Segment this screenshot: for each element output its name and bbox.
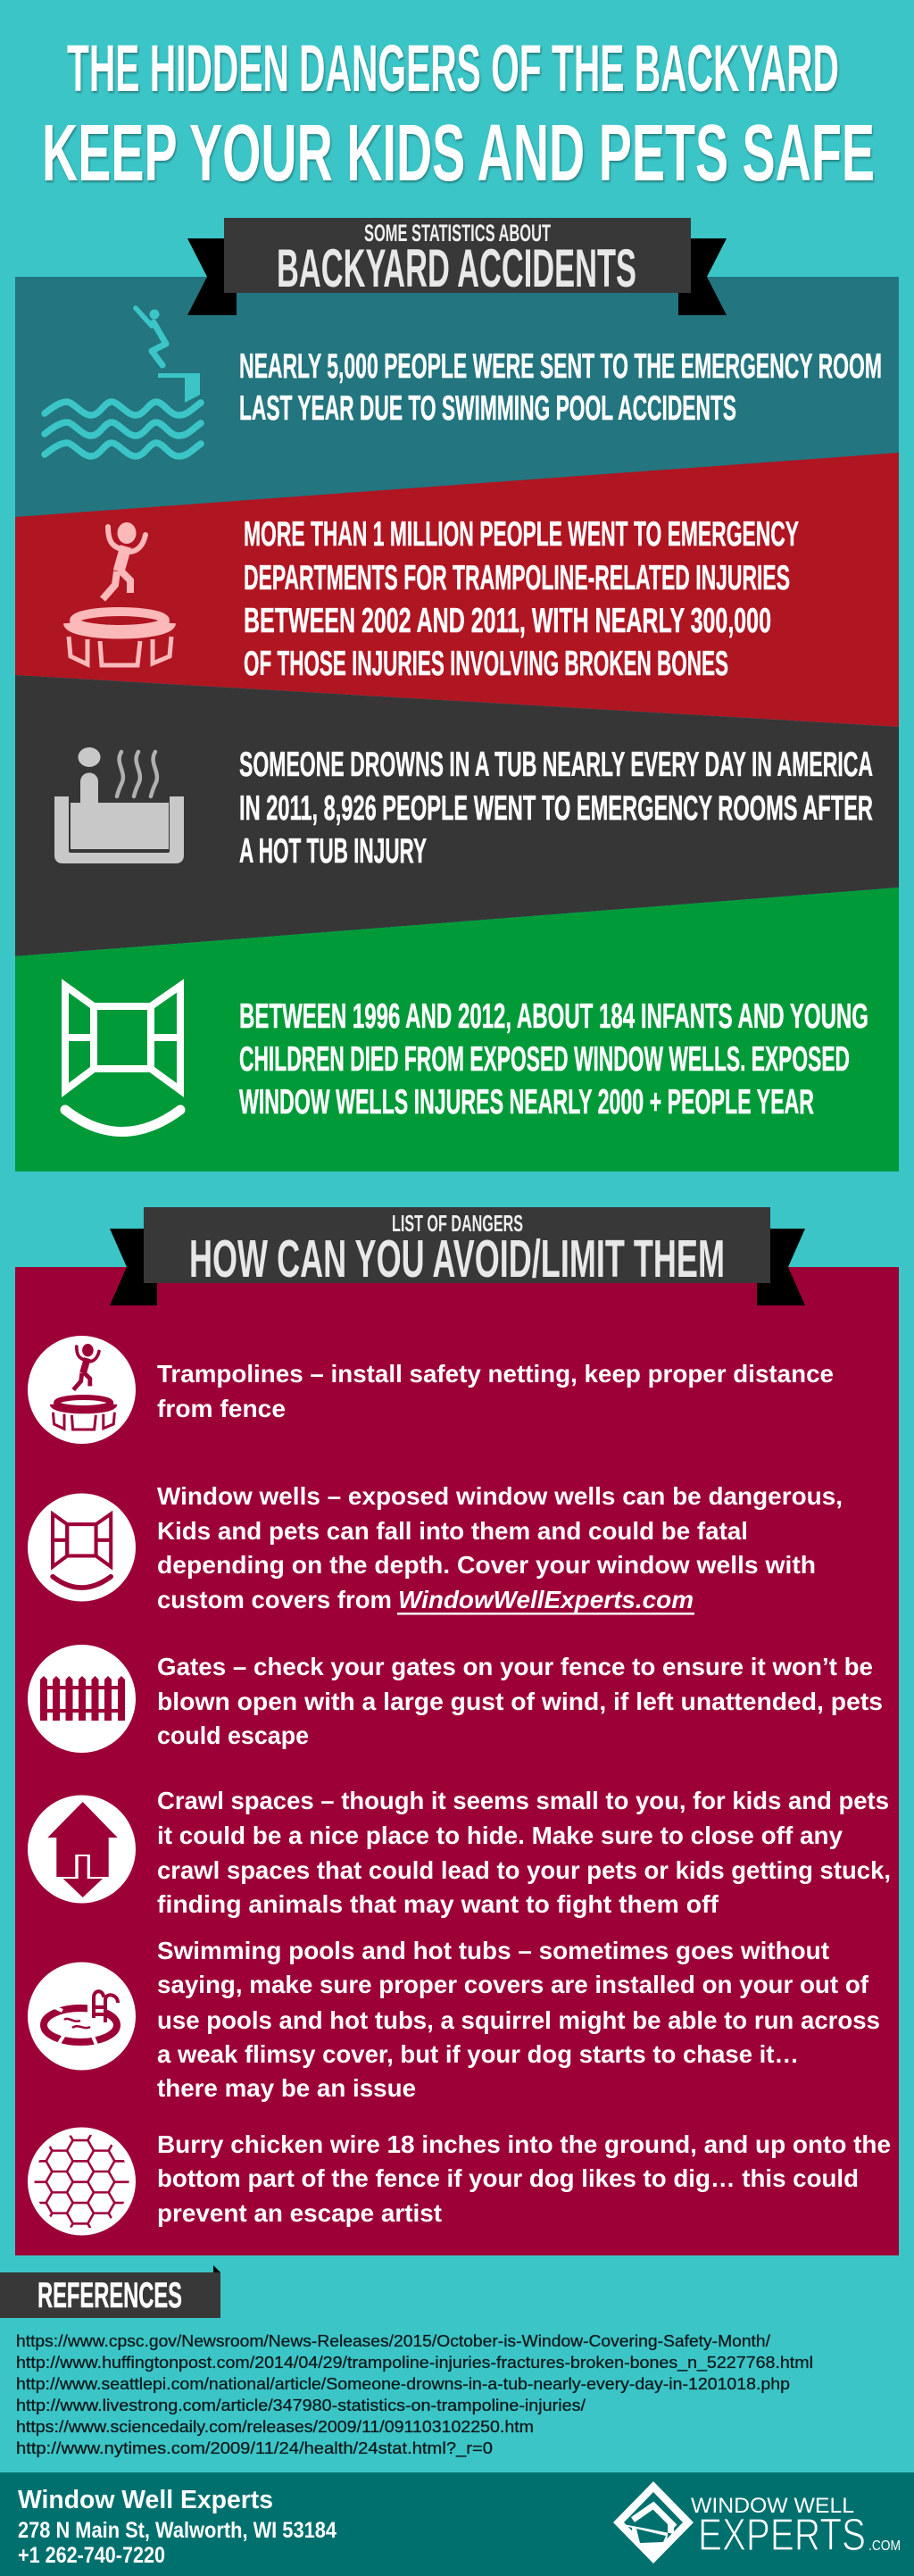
references list: https://www.cpsc.gov/Newsroom/News-Releases/2015/October-is-Window-Covering-Safety-Month/ — [16, 2332, 770, 2350]
item: chicken wire — [28, 2127, 891, 2236]
item: crawl spaces: finding animals that may want to fight them off — [157, 1890, 719, 1918]
logo: WINDOW WELL — [691, 2494, 854, 2518]
panel: swimming pool accidents — [15, 277, 899, 527]
panel: statistics — [15, 277, 899, 1171]
panel: list of dangers — [15, 1267, 899, 2255]
item: window wells: WindowWellExperts.com — [398, 1586, 694, 1613]
icon: trampoline — [67, 522, 172, 665]
banner: how can you avoid: LIST OF DANGERS — [392, 1210, 523, 1237]
references list: http://www.livestrong.com/article/347980-statistics-on-trampoline-injuries/ — [16, 2397, 586, 2414]
references list — [16, 2332, 813, 2458]
item: swimming pools and hot tubs: there may be an issue — [157, 2074, 416, 2102]
contact details: Window Well Experts — [18, 2486, 273, 2514]
icon: diver and water — [45, 308, 201, 456]
references heading — [0, 2265, 220, 2318]
contact details: +1 262-740-7220 — [18, 2543, 165, 2568]
item: window wells: Window wells – exposed window wells can be dangerous, — [157, 1482, 843, 1510]
text: hot tub statistic — [239, 746, 873, 871]
item: gates: Gates – check your gates on your fence to ensure it won’t be — [157, 1653, 873, 1680]
item: window wells — [28, 1482, 843, 1614]
item: chicken wire: bottom part of the fence if your dog likes to dig… this could — [157, 2164, 859, 2192]
item: swimming pools and hot tubs: use pools and hot tubs, a squirrel might be able to run across — [157, 2006, 880, 2034]
banner: how can you avoid — [110, 1207, 805, 1305]
panel: trampoline injuries — [15, 453, 899, 727]
item: trampolines: Trampolines – install safety netting, keep proper distance — [157, 1360, 834, 1388]
icon: hot tub — [54, 747, 184, 863]
logo: EXPERTS — [698, 2509, 866, 2560]
contact details: 278 N Main St, Walworth, WI 53184 — [18, 2518, 337, 2543]
text: window well statistic — [239, 997, 868, 1121]
text: trampoline statistic — [244, 515, 799, 683]
item: window wells: Kids and pets can fall into them and could be fatal — [157, 1517, 748, 1545]
item: swimming pools and hot tubs: saying, make sure proper covers are installed on your out of — [157, 1971, 869, 1998]
footer — [0, 2472, 914, 2576]
references list: http://www.huffingtonpost.com/2014/04/29/trampoline-injuries-fractures-broken-bones_n_5227768.html — [16, 2354, 813, 2372]
references heading: REFERENCES — [37, 2276, 182, 2315]
logo: .COM — [868, 2538, 901, 2554]
logo — [613, 2481, 901, 2563]
panel: hot tub injuries — [15, 675, 899, 956]
item: crawl spaces — [28, 1787, 891, 1918]
item: trampolines: from fence — [157, 1395, 286, 1422]
item: crawl spaces: Crawl spaces – though it seems small to you, for kids and pets — [157, 1787, 889, 1814]
item: swimming pools and hot tubs — [28, 1937, 880, 2102]
item: swimming pools and hot tubs: Swimming pools and hot tubs – sometimes goes without — [157, 1937, 829, 1964]
item: crawl spaces: it could be a nice place to hide. Make sure to close off any — [157, 1822, 843, 1849]
text: swimming pool statistic — [239, 347, 882, 428]
banner: backyard accidents: BACKYARD ACCIDENTS — [277, 238, 636, 298]
item: crawl spaces: crawl spaces that could lead to your pets or kids getting stuck, — [157, 1856, 891, 1884]
item: window wells: depending on the depth. Cover your window wells with — [157, 1551, 816, 1579]
banner: backyard accidents: SOME STATISTICS ABOUT — [364, 220, 551, 246]
references list: https://www.sciencedaily.com/releases/2009/11/091103102250.htm — [16, 2418, 534, 2436]
banner: backyard accidents — [187, 218, 727, 315]
item: trampolines — [28, 1336, 834, 1444]
references list: http://www.seattlepi.com/national/article/Someone-drowns-in-a-tub-nearly-every-day-in-1201018.php — [16, 2375, 790, 2393]
item: gates: blown open with a large gust of wind, if left unattended, pets — [157, 1688, 883, 1715]
contact details — [18, 2486, 337, 2568]
icon: window well — [65, 986, 180, 1132]
panel: window well deaths — [15, 888, 899, 1171]
item: chicken wire: Burry chicken wire 18 inches into the ground, and up onto the — [157, 2130, 891, 2158]
references list: http://www.nytimes.com/2009/11/24/health/24stat.html?_r=0 — [16, 2439, 493, 2458]
item: gates: could escape — [157, 1722, 309, 1749]
title — [42, 31, 875, 198]
item: window wells: custom covers from — [157, 1586, 392, 1613]
item: chicken wire: prevent an escape artist — [157, 2199, 442, 2227]
item: gates — [28, 1645, 883, 1753]
text: hot tub statistic: A HOT TUB INJURY — [239, 832, 427, 871]
item: swimming pools and hot tubs: a weak flimsy cover, but if your dog starts to chase it… — [157, 2040, 799, 2068]
